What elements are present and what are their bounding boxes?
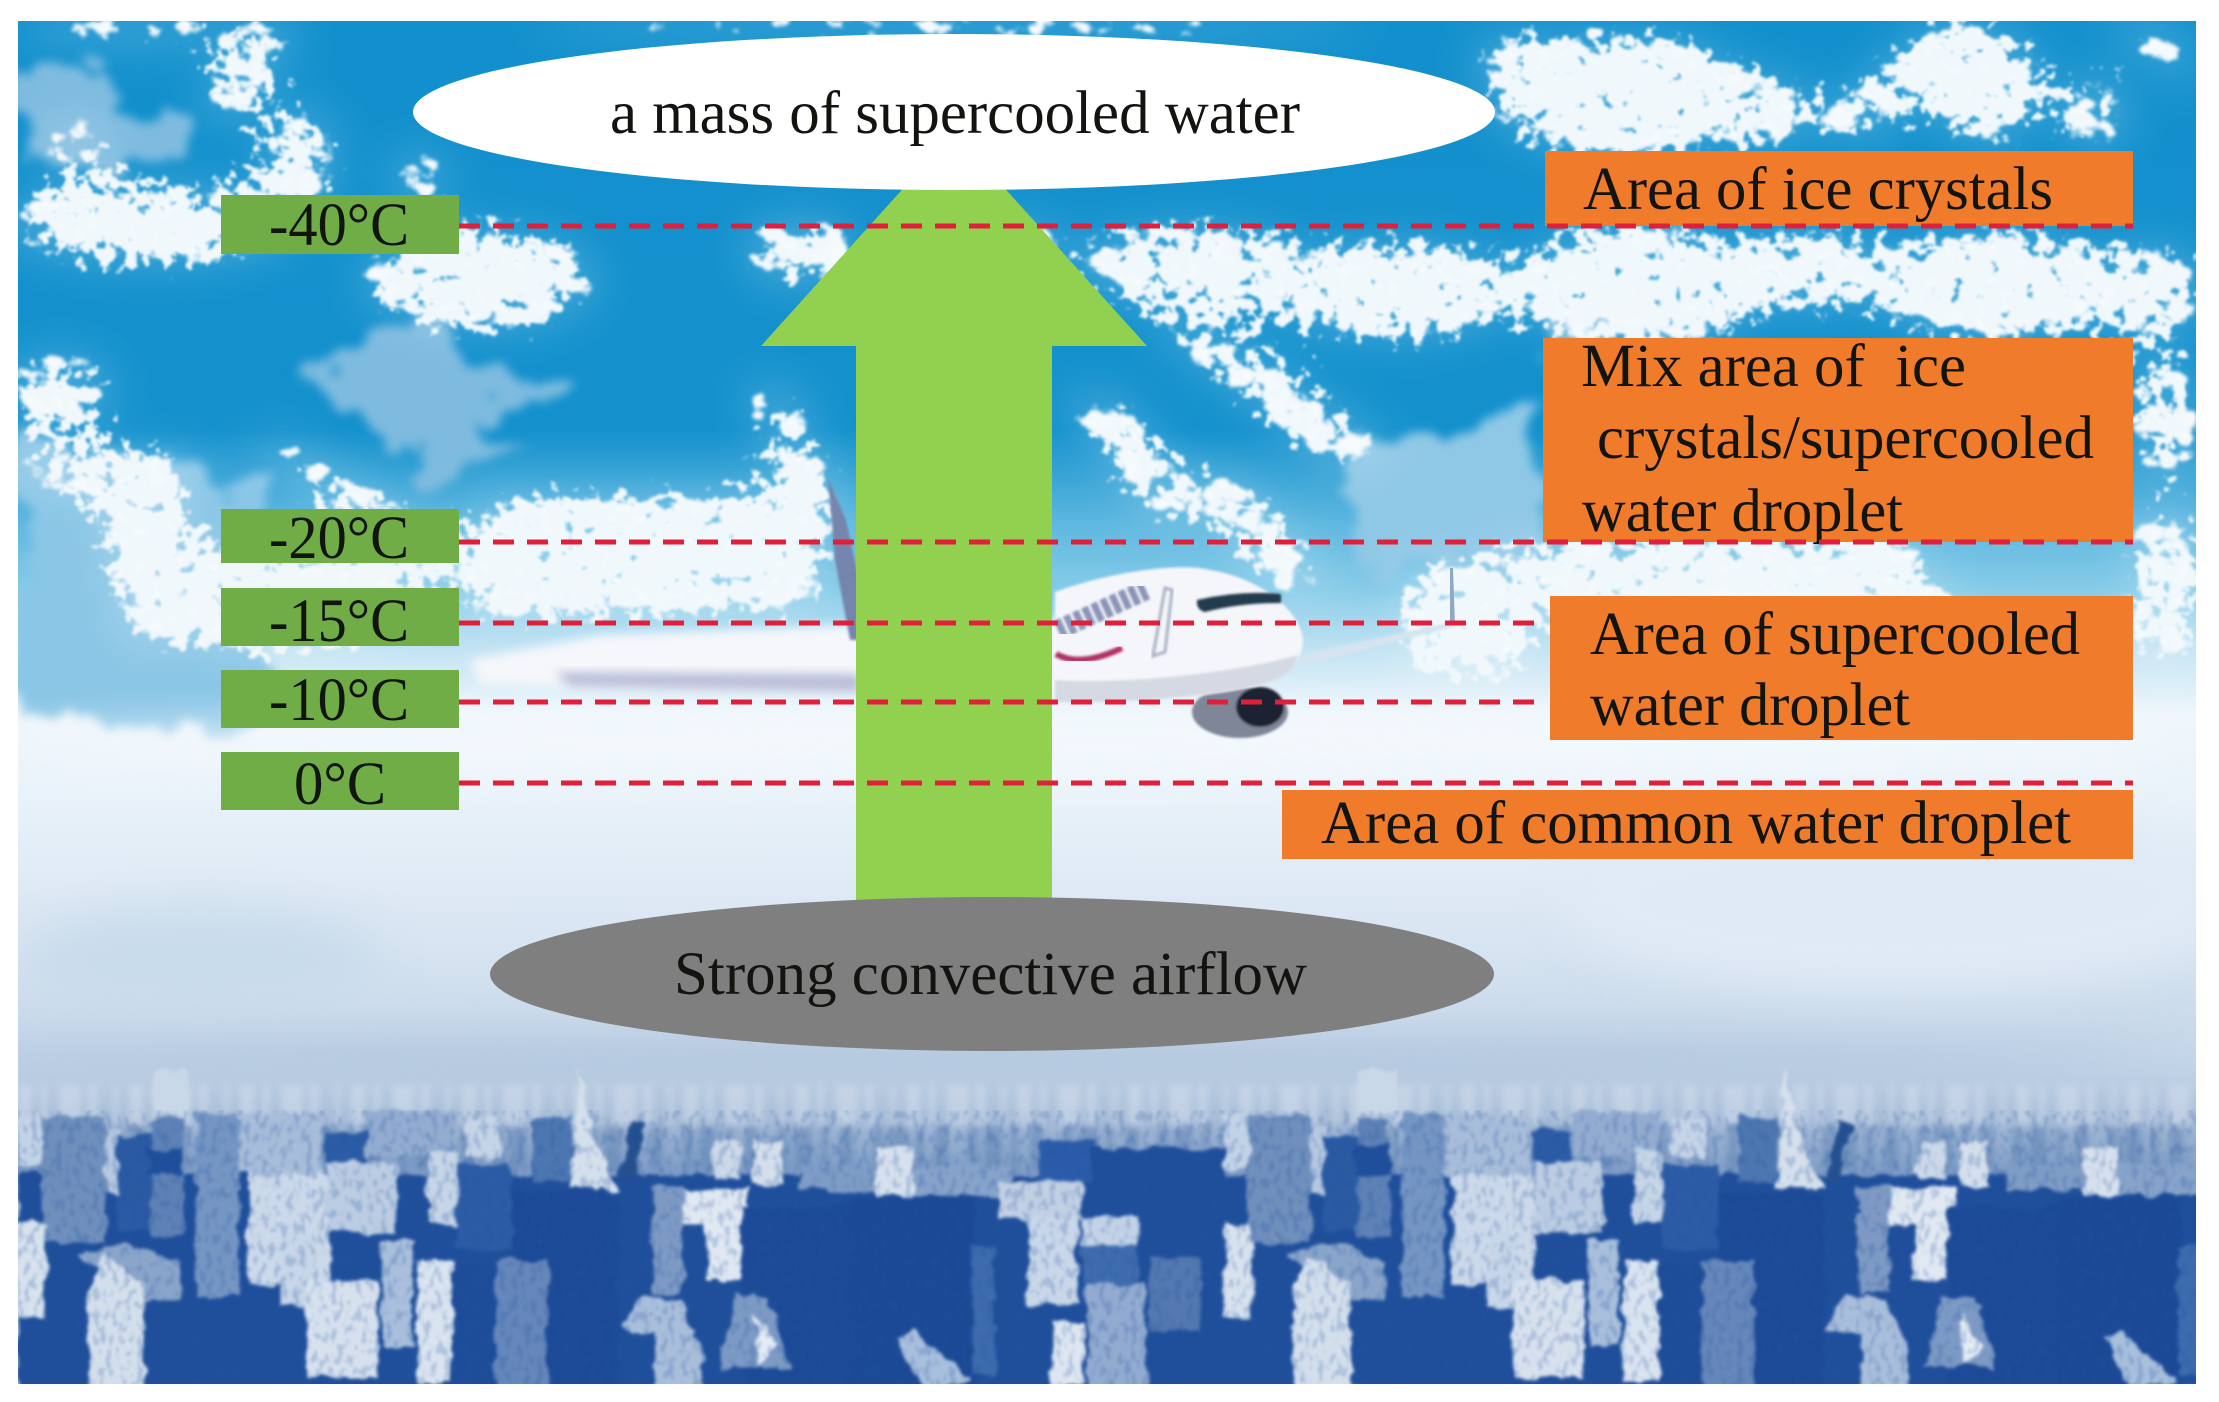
label: area of supercooled water droplet: Area of supercooled — [1590, 601, 2080, 668]
label: mix area: crystals/supercooled — [1597, 405, 2094, 472]
temperature tag: -40°C — [221, 192, 459, 259]
fuselage — [1055, 567, 1303, 702]
white cloud masses — [0, 12, 2210, 680]
label: mix area: water droplet — [1582, 478, 1903, 545]
soft glow around clouds — [0, 12, 2210, 680]
wing near side — [1300, 622, 1456, 665]
winglet — [1450, 568, 1455, 625]
temperature tag: -10°C — [221, 667, 459, 734]
distant skyline stripes — [18, 1105, 2196, 1148]
aircraft rear body — [470, 620, 1070, 700]
airplane — [470, 478, 1456, 738]
temperature tag: 0°C: 0°C — [294, 751, 386, 818]
cockpit windows — [1197, 593, 1281, 612]
low cloud bank — [0, 717, 2219, 1076]
bottom ellipse: strong convective airflow: Strong convective airflow — [674, 941, 1307, 1008]
buildings, two copies of one photo — [18, 1065, 2219, 1390]
label: mix area — [1543, 333, 2133, 545]
temperature tag: -15°C: -15°C — [269, 588, 409, 655]
label: area of supercooled water droplet: water droplet — [1590, 672, 1910, 739]
temperature tag: -40°C: -40°C — [269, 192, 409, 259]
upward airflow arrow — [761, 132, 1147, 900]
passenger door — [1153, 588, 1172, 656]
temperature tag: -10°C: -10°C — [269, 667, 409, 734]
temperature boundary dashed lines — [459, 226, 2133, 783]
top ellipse: a mass of supercooled water — [413, 34, 1495, 190]
building detail grain — [18, 1110, 2196, 1390]
label: area of common water droplet: Area of common water droplet — [1321, 790, 2071, 857]
bottom ellipse: strong convective airflow — [490, 897, 1494, 1051]
label: mix area: Mix area of ice — [1581, 333, 1966, 400]
temperature tag: 0°C — [221, 751, 459, 818]
tail fin — [828, 478, 858, 640]
temperature tag: -15°C — [221, 588, 459, 655]
rear body underside shadow — [555, 672, 860, 692]
city skyline — [18, 1065, 2219, 1390]
city haze band — [18, 1075, 2196, 1195]
livery lines — [1058, 590, 1146, 630]
top ellipse: a mass of supercooled water: a mass of supercooled water — [610, 80, 1300, 147]
label: area of ice crystals: Area of ice crystals — [1583, 156, 2053, 223]
temperature tag: -20°C: -20°C — [269, 505, 409, 572]
label: area of supercooled water droplet — [1550, 596, 2133, 740]
light blue land and haze patches — [18, 65, 1620, 720]
temperature tag: -20°C — [221, 505, 459, 572]
fine cloud flecks — [0, 12, 2210, 680]
engine — [1192, 686, 1288, 738]
